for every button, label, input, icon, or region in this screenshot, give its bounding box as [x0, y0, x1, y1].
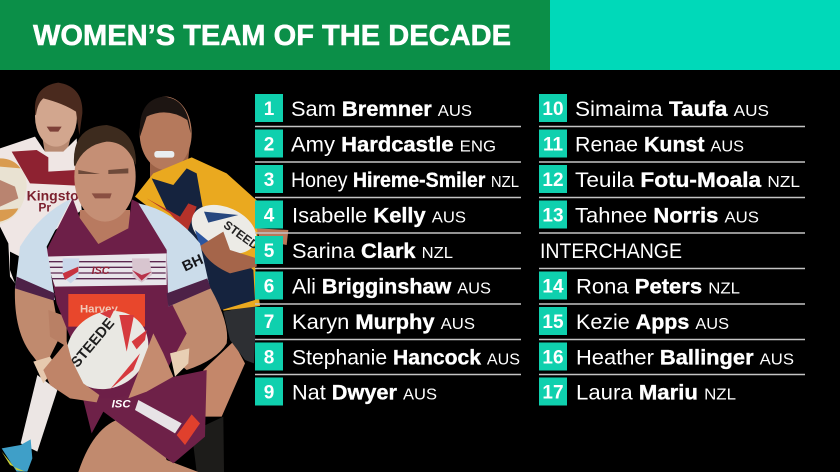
row 2: [255, 130, 496, 158]
row 4: [255, 200, 466, 228]
player: front in maroon jersey: [15, 125, 227, 472]
player: front in maroon jersey: Harvey: [80, 304, 118, 316]
row 16: [539, 342, 794, 370]
player: front in maroon jersey: ISC: [92, 265, 110, 277]
player: back left in white jersey: [0, 83, 87, 472]
row 4: 4: [264, 206, 275, 226]
row 1: 1: [264, 99, 275, 120]
row 9: Nat Dwyer AUS: [292, 382, 437, 404]
player: back left in white jersey: Pr: [38, 201, 51, 215]
row 1: Sam Bremner AUS: [291, 98, 472, 121]
player: front in maroon jersey: STEEDE: [68, 316, 118, 371]
row 14: Rona Peters NZL: [576, 276, 740, 298]
row 16: Heather Ballinger AUS: [576, 346, 794, 370]
row 14: [539, 272, 740, 300]
row 10: Simaima Taufa AUS: [575, 98, 769, 121]
row 1: [255, 94, 472, 122]
player: front in maroon jersey: BH: [180, 252, 206, 275]
row 13: 13: [542, 206, 564, 226]
row 9: 9: [264, 382, 274, 404]
row 15: Kezie Apps AUS: [576, 311, 729, 334]
row 6: Ali Brigginshaw AUS: [292, 276, 491, 298]
row 3: 3: [264, 170, 274, 191]
row 2: 2: [264, 134, 274, 156]
row 3: Honey Hireme-Smiler NZL: [291, 169, 519, 192]
player: front in maroon jersey: ISC: [112, 398, 131, 410]
row 12: 12: [542, 170, 564, 191]
player: back right in yellow jersey: STEEDE: [221, 218, 268, 257]
player: back left in white jersey: Kingston: [27, 188, 87, 204]
row 13: [539, 200, 759, 228]
header band: [0, 0, 840, 70]
row 15: 15: [542, 312, 564, 333]
list: players 10 to 17 with interchange: [539, 94, 805, 406]
row 11: Renae Kunst AUS: [575, 134, 744, 156]
row 8: 8: [264, 348, 274, 368]
list: starting players 1 to 9: [255, 94, 521, 406]
row 5: [255, 236, 453, 264]
row 6: [255, 272, 491, 300]
row 11: [539, 130, 744, 158]
row 13: Tahnee Norris AUS: [575, 204, 759, 228]
row 7: Karyn Murphy AUS: [292, 311, 475, 334]
row 16: 16: [542, 348, 564, 368]
row 7: 7: [264, 312, 274, 333]
interchange heading: INTERCHANGE: [540, 240, 682, 263]
row 4: Isabelle Kelly AUS: [292, 204, 466, 228]
row 5: 5: [264, 241, 275, 262]
player photos: [0, 83, 288, 472]
row 9: [255, 378, 437, 406]
row 17: 17: [542, 382, 564, 404]
row 10: [539, 94, 769, 122]
row 12: Teuila Fotu-Moala NZL: [575, 169, 800, 192]
row 17: [539, 378, 736, 406]
row 17: Laura Mariu NZL: [576, 382, 736, 404]
row 15: [539, 307, 729, 335]
row 7: [255, 307, 475, 335]
row 11: 11: [543, 134, 563, 156]
row 8: Stephanie Hancock AUS: [292, 346, 520, 370]
row 10: 10: [542, 99, 564, 120]
title: WOMEN’S TEAM OF THE DECADE: [33, 20, 511, 52]
row 5: Sarina Clark NZL: [292, 240, 453, 263]
row 2: Amy Hardcastle ENG: [291, 134, 496, 156]
player: back right in yellow jersey: [135, 97, 288, 472]
row 6: 6: [264, 276, 274, 298]
row 14: 14: [542, 276, 564, 298]
